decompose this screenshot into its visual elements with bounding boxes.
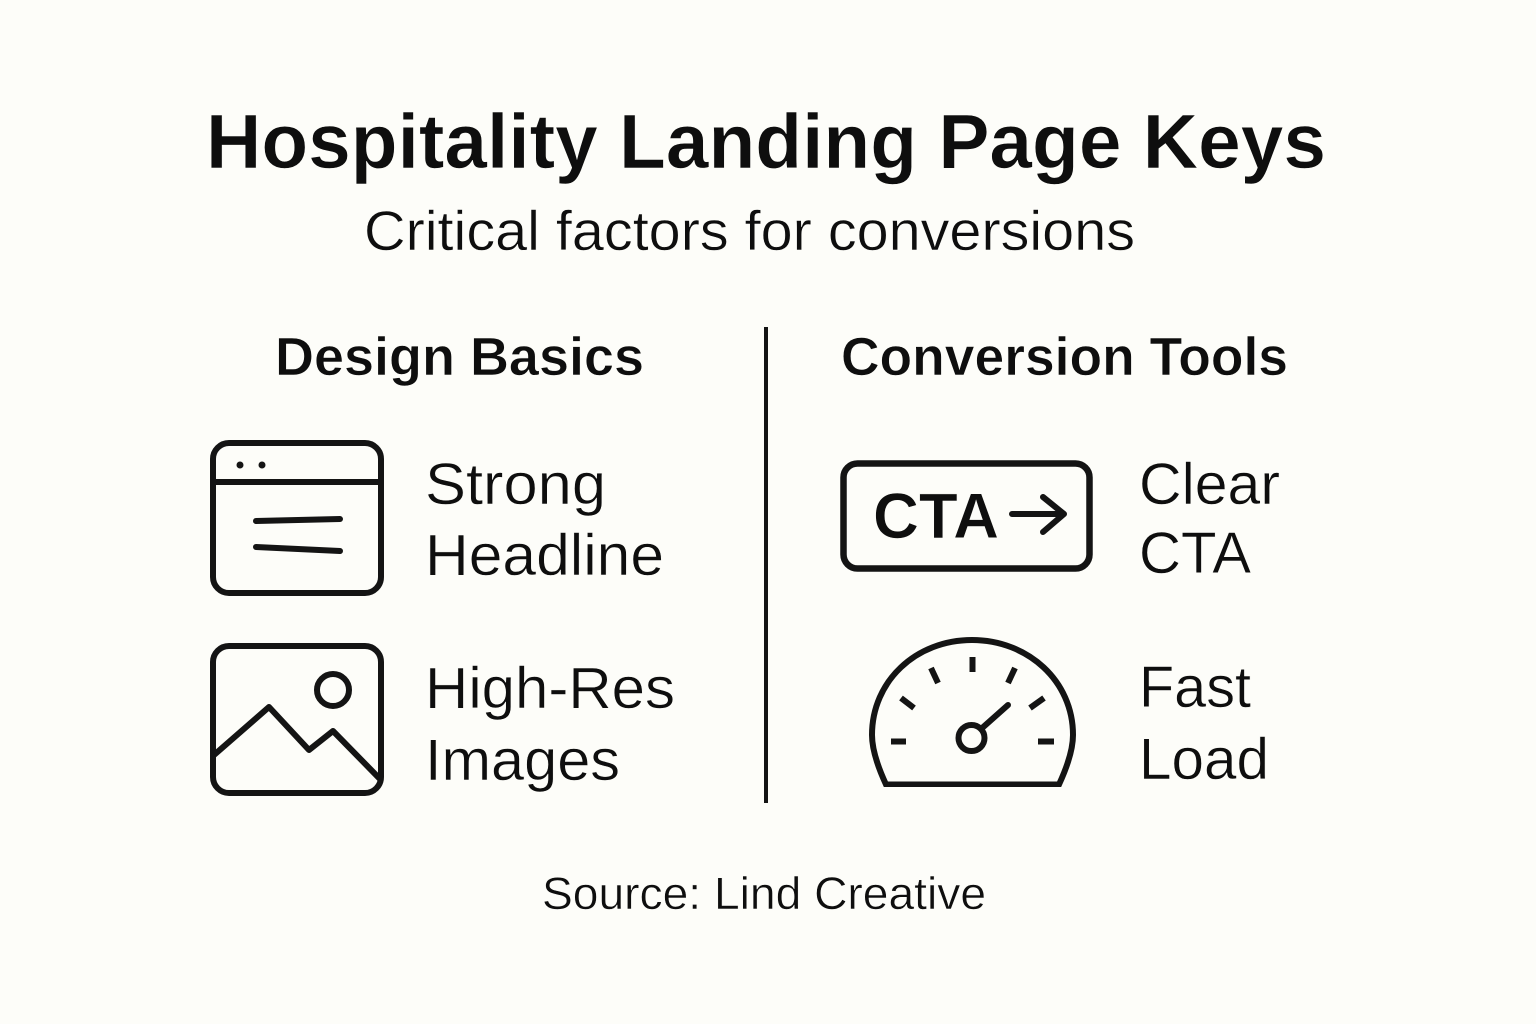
icon: CTA button: [844, 464, 1090, 568]
label: high-res images: High-Res: [425, 656, 675, 721]
icon: browser window: [213, 443, 381, 593]
subtitle: Critical factors for conversions: [364, 199, 1135, 262]
label: fast load: Fast: [1139, 655, 1251, 720]
label: clear cta: CTA: [1139, 521, 1251, 586]
source note: Source: Lind Creative: [542, 868, 986, 919]
column divider: [764, 327, 768, 803]
heading: design basics: Design Basics: [275, 327, 644, 387]
label: high-res images: Images: [425, 728, 620, 793]
label: fast load: Load: [1139, 727, 1269, 792]
icon: speedometer gauge: [872, 640, 1073, 784]
label: strong headline: Headline: [425, 523, 664, 588]
label: clear cta: Clear: [1139, 452, 1280, 517]
title: Hospitality Landing Page Keys: [206, 99, 1326, 185]
label: strong headline: Strong: [425, 452, 606, 517]
icon: CTA button: CTA: [873, 480, 999, 552]
heading: conversion tools: Conversion Tools: [841, 327, 1288, 387]
icon: image: [213, 646, 381, 793]
